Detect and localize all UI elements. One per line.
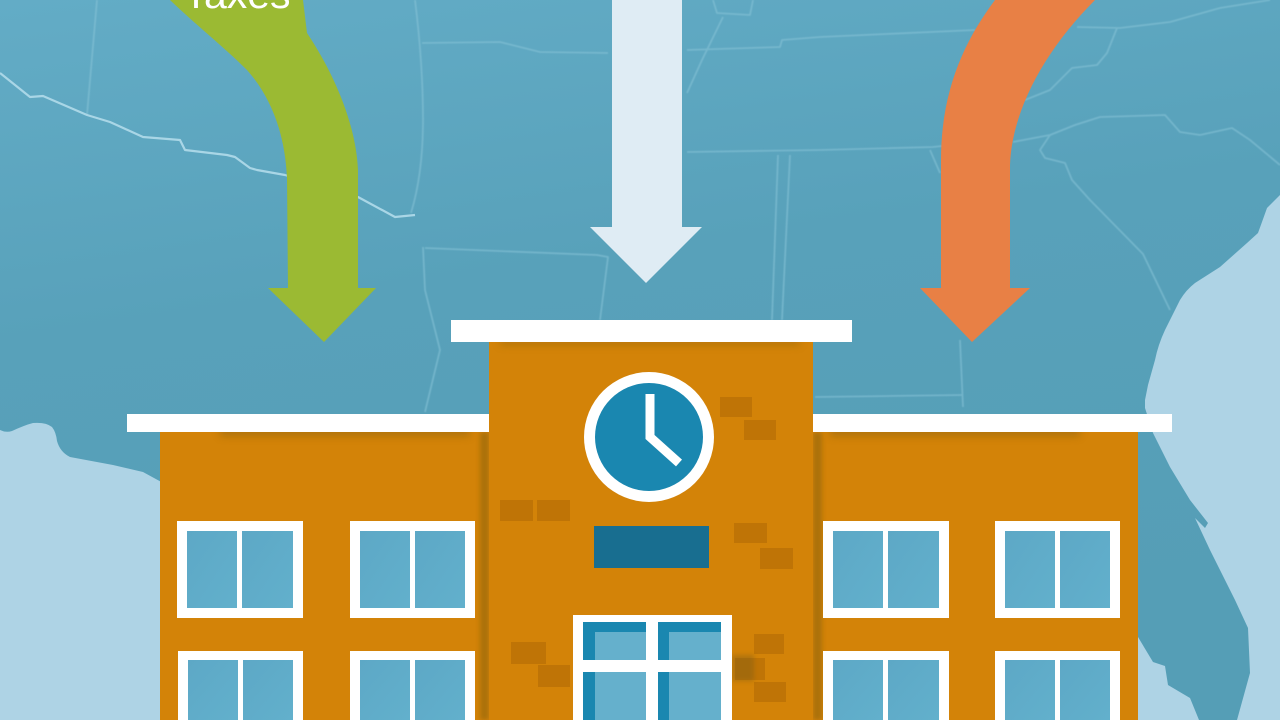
window: lower right 1 <box>823 651 949 720</box>
tower roof <box>451 320 852 342</box>
wing shadows <box>220 428 1080 720</box>
map: state borders <box>87 0 1280 412</box>
window: upper right 2 <box>995 521 1120 618</box>
left roof <box>127 414 489 432</box>
bricks <box>500 397 793 702</box>
right wing <box>813 432 1138 720</box>
sign <box>594 526 709 568</box>
left wing <box>160 432 489 720</box>
window: lower right 2 <box>995 651 1120 720</box>
window: lower left 1 <box>178 651 303 720</box>
window: upper left 2 <box>350 521 475 618</box>
right roof <box>813 414 1172 432</box>
arrow: center (white) <box>590 0 702 283</box>
water: atlantic right <box>1145 195 1280 720</box>
center tower <box>489 342 813 720</box>
school building <box>127 320 1172 720</box>
arrow: right (orange) <box>920 0 1095 342</box>
arrow: taxes (green) <box>170 0 376 342</box>
window: lower left 2 <box>350 651 475 720</box>
window: upper left 1 <box>177 521 303 618</box>
water: gulf left <box>0 423 165 720</box>
door <box>573 615 732 720</box>
map: river border <box>0 73 415 217</box>
icon: clock <box>584 372 714 502</box>
window: upper right 1 <box>823 521 949 618</box>
door shadow <box>732 655 754 681</box>
water: gulf right of building <box>1130 625 1199 720</box>
tower roof shadow <box>500 339 800 345</box>
